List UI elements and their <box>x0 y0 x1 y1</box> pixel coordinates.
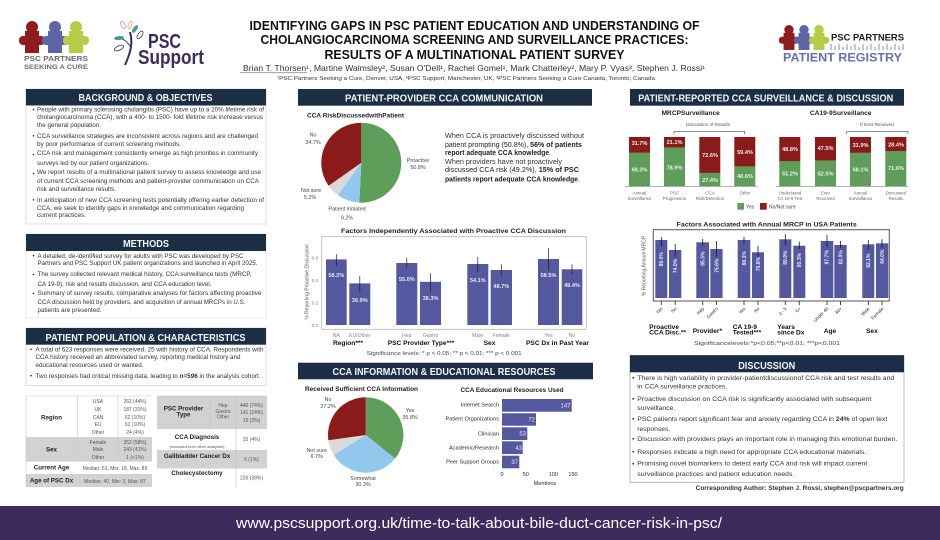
bar chart: factors associated with annual MRCP in USA patients: 88.3% <box>742 251 748 265</box>
bar chart: factors associated with annual MRCP in USA patients: 6+ <box>794 306 802 313</box>
table: demographics: Median: 40, Min: 3, Max: 87 <box>84 479 146 485</box>
pie chart: received sufficient CCA information: Somewhat <box>350 476 376 482</box>
table: demographics: UK <box>95 407 102 413</box>
bar chart: factors associated with proactive CCA discussion: Significance levels: * p < 0.05; ** p < 0.01; *** p < 0.001 <box>367 351 522 357</box>
stacked bars: MRCP surveillance: 40.6% <box>737 174 753 180</box>
stacked bars: CA19-9 surveillance: CA 19-9 Test <box>777 196 803 201</box>
table: clinical characteristics: CCA Diagnosis <box>175 434 220 441</box>
corresponding author: Corresponding Author: Stephen J. Rossi, stephen@pscpartners.org <box>696 485 904 492</box>
table: demographics <box>26 396 152 487</box>
text block: discussion bullets: Discussion with providers plays an important role in managing this emotional burden. <box>637 436 898 443</box>
bar chart: CCA educational resources used: Academic/Research <box>449 446 499 452</box>
text block: methods bullets: Summary of survey results, comparative analyses for factors affecting proactive <box>38 290 262 297</box>
affiliations: ¹PSC Partners Seeking a Cure, Denver, USA, ²PSC Support, Manchester, UK, ³PSC Partners Seeking a Cure Canada, Toronto, Canada <box>277 76 655 82</box>
bar chart: CCA educational resources used: Clinician <box>478 431 499 437</box>
text block: background bullets <box>33 107 264 219</box>
bar chart: factors associated with annual MRCP in USA patients: Yes <box>738 306 747 315</box>
pie chart: received sufficient CCA information: Received Sufficient CCA Information <box>305 386 418 393</box>
table: demographics: 243 (41%) <box>123 447 147 453</box>
table: demographics: 61 (10%) <box>125 422 145 428</box>
text block: discussion bullets: PSC patients report significant fear and anxiety regarding CCA in 24% of open text <box>637 416 888 423</box>
text block: background bullets: In anticipation of new CCA screening tests potentially offering earlier detection of <box>37 197 264 204</box>
logo: PSC Partners Patient Registry <box>779 25 904 64</box>
bar chart: factors associated with annual MRCP in USA patients: Hep <box>696 306 706 316</box>
panel: patient population and characteristics <box>26 328 266 386</box>
heading: methods: METHODS <box>123 238 169 250</box>
bar chart: factors associated with annual MRCP in USA patients: No <box>670 306 678 314</box>
text block: methods bullets: A detailed, de-identified survey for adults with PSC was developed by PSC <box>38 253 244 260</box>
stacked bars: CA19-9 surveillance: Received <box>816 196 835 201</box>
bar chart: factors associated with annual MRCP in USA patients: Tested*** <box>733 330 762 337</box>
bar chart: factors associated with proactive CCA discussion: 58.5% <box>541 273 556 279</box>
bar chart: factors associated with proactive CCA discussion: Sex <box>484 340 496 347</box>
table: clinical characteristics: 15 (2%) <box>243 418 261 424</box>
bar chart: CCA educational resources used: 50 <box>523 472 529 478</box>
title: RESULTS OF A MULTINATIONAL PATIENT SURVEY <box>324 48 625 62</box>
heading: methods <box>26 234 266 251</box>
table: demographics: Female <box>90 440 107 446</box>
bar chart: factors associated with proactive CCA discussion: 36.9% <box>352 298 368 304</box>
pie chart: CCA risk discussed with patient: 50.8% <box>410 165 426 171</box>
table: demographics: USA <box>93 399 104 405</box>
panel heading: patient-reported CCA surveillance and discussion <box>630 89 904 106</box>
bar chart: factors associated with annual MRCP in USA patients: 87.7% <box>825 250 831 264</box>
bar chart: factors associated with proactive CCA discussion: 0.0 <box>312 323 318 328</box>
text block: knowledge callout: patient prompting (50.8%), 56% of patients <box>445 142 582 149</box>
text block: background bullets: current practices. <box>37 212 86 219</box>
stacked bars: CA19-9 surveillance: If Ever Received <box>860 122 894 127</box>
pie chart: received sufficient CCA information: 27.2% <box>320 404 336 410</box>
bar chart: factors associated with annual MRCP in USA patients: Age <box>824 328 836 335</box>
text block: background bullets: CCA surveillance strategies are inconsistent across regions and are challenged <box>37 133 258 140</box>
table: demographics: 187 (31%) <box>123 407 147 413</box>
text block: discussion bullets: Responses indicate a high need for appropriate CCA educational materials. <box>637 449 867 456</box>
text block: methods bullets: CA 19-9), risk and results discussion, and CCA education level. <box>38 281 212 288</box>
pie chart: CCA risk discussed with patient: CCA RiskDiscussedwithPatient <box>307 113 405 120</box>
text block: methods bullets: Partners and PSC Support UK patient organizations and launched in April 2025. <box>38 260 258 267</box>
stacked bars: MRCP surveillance: 78.9% <box>667 166 682 172</box>
bar chart: CCA educational resources used <box>446 387 578 487</box>
text block: knowledge callout: report adequate CCA knowledge. <box>445 150 551 157</box>
text block: knowledge callout: patients report adequate CCA knowledge. <box>445 176 580 184</box>
bar chart: factors associated with annual MRCP in USA patients: CCA Disc.** <box>649 330 686 337</box>
bar chart: factors associated with annual MRCP in USA patients: Significancelevels:*p<0.05;**p<0.01; ***p<0.001 <box>694 341 840 347</box>
title: IDENTIFYING GAPS IN PSC PATIENT EDUCATION AND UNDERSTANDING OF <box>250 19 700 33</box>
table: clinical characteristics: Type <box>177 412 191 418</box>
stacked bars: MRCP surveillance: 68.3% <box>632 168 647 174</box>
table: clinical characteristics: Hep <box>218 403 228 409</box>
text block: background bullets: CCA risk and management consistently emerge as high priorities in community <box>37 150 259 157</box>
table: clinical characteristics: 25 (4%) <box>243 437 261 443</box>
stacked bars: MRCP surveillance: PSC <box>670 190 679 195</box>
table: demographics: Age of PSC Dx <box>30 478 74 484</box>
stacked bars: CA19-9 surveillance: Results <box>889 196 904 201</box>
bar chart: factors associated with annual MRCP in USA patients: Yes <box>655 306 664 315</box>
bar chart: CCA educational resources used: Internet Search <box>461 403 499 409</box>
table: demographics: Other <box>92 430 105 436</box>
panel heading: patient-reported CCA surveillance and discussion: PATIENT-REPORTED CCA SURVEILLANCE & DISCUSSION <box>638 92 893 104</box>
text block: background bullets: by poor performance of current screening methods. <box>37 141 181 148</box>
table: demographics: EU <box>95 422 102 428</box>
pie chart: CCA risk discussed with patient: Patient Initiated <box>328 206 366 212</box>
logo: PSC Partners Seeking a Cure <box>19 21 89 71</box>
table: clinical characteristics: (excluded from other analyses) <box>170 444 225 449</box>
bar chart: CCA educational resources used: 147 <box>560 404 571 410</box>
table: clinical characteristics: Gastro <box>215 409 231 415</box>
bar chart: factors associated with annual MRCP in USA patients: 75.6% <box>714 258 720 273</box>
heading: patient population <box>26 328 266 345</box>
bar chart: factors associated with annual MRCP in USA patients: 84.0% <box>880 249 886 264</box>
bar chart: CCA educational resources used: 150 <box>568 472 578 478</box>
bar chart: CCA educational resources used: 72 <box>528 418 536 424</box>
footer banner with URL <box>0 506 940 540</box>
stacked bars: MRCP surveillance: 27.4% <box>702 178 718 184</box>
heading: background and objectives <box>26 89 266 106</box>
logo: PSC Partners Patient Registry: PATIENT REGISTRY <box>783 50 902 64</box>
stacked bars: CA19-9 surveillance: 28.4% <box>888 142 904 148</box>
logo: PSC Partners Seeking a Cure: SEEKING A CURE <box>24 64 89 71</box>
pie chart: CCA risk discussed with patient: 5.2% <box>304 195 316 201</box>
bar chart: factors associated with annual MRCP in USA patients: 80.3% <box>797 252 803 267</box>
stacked bars: CA19-9 surveillance: Surveillance <box>849 196 873 201</box>
stacked bars: CA19-9 surveillance: Annual <box>854 190 867 195</box>
title <box>250 19 700 62</box>
bar chart: factors associated with proactive CCA discussion: 55.0% <box>399 277 415 283</box>
bar chart: factors associated with annual MRCP in USA patients: Factors Associated with Annual MRCP in USA Patients <box>677 222 857 229</box>
text block: population bullets: A total of 623 responses were received, 25 with history of CCA. Respondents with <box>36 346 264 354</box>
pie chart: CCA risk discussed with patient: 34.7% <box>305 140 321 146</box>
bar chart: CCA educational resources used: Mentions <box>534 481 557 487</box>
bar chart: factors associated with annual MRCP in USA patients: 40+ <box>834 306 843 315</box>
stacked bars: MRCP surveillance: 72.6% <box>702 153 718 159</box>
stacked bars: MRCP surveillance: Other <box>740 190 751 195</box>
title: CHOLANGIOCARCINOMA SCREENING AND SURVEILLANCE PRACTICES: <box>260 33 688 47</box>
table: demographics: 24 (4%) <box>126 430 144 436</box>
bar chart: factors associated with proactive CCA discussion: Male <box>472 333 484 339</box>
bar chart: factors associated with proactive CCA discussion: Female <box>493 333 510 339</box>
bar chart: factors associated with annual MRCP in USA patients: Female <box>870 306 885 321</box>
text block: background bullets: the general population. <box>37 122 101 129</box>
stacked bars: CA19-9 surveillance: 52.5% <box>818 172 833 178</box>
panel: methods <box>26 234 266 318</box>
text block: discussion bullets: surveillance. <box>637 405 676 412</box>
bar chart: factors associated with annual MRCP in USA patients: 82.1% <box>866 253 872 268</box>
logo: PSC Partners Patient Registry: PSC PARTNERS <box>831 32 904 42</box>
panel heading: patient-provider CCA communication: PATIENT-PROVIDER CCA COMMUNICATION <box>345 92 543 104</box>
panel: background and objectives <box>26 89 266 224</box>
text block: population bullets: educational resources used or wanted. <box>36 362 144 369</box>
bar chart: factors associated with annual MRCP in USA patients: since Dx <box>777 330 805 337</box>
bar chart: factors associated with annual MRCP in USA patients <box>642 222 889 347</box>
text block: methods bullets <box>33 253 262 314</box>
text block: background bullets: of current CCA screening methods and patient-provider communication on CCA <box>37 178 260 185</box>
stacked bars: MRCP surveillance <box>625 110 757 201</box>
text block: discussion bullets: in CCA surveillance practices. <box>637 383 728 390</box>
bar chart: factors associated with annual MRCP in USA patients: 82.0% <box>838 250 844 264</box>
panel heading: CCA information and educational resources: CCA INFORMATION & EDUCATIONAL RESOURCES <box>332 366 556 378</box>
bar chart: factors associated with annual MRCP in USA patients: 74.0% <box>673 258 679 273</box>
pie chart: received sufficient CCA information <box>305 386 418 488</box>
text block: discussion bullets: responses. <box>637 426 671 433</box>
bar chart: factors associated with proactive CCA discussion: 38.3% <box>423 296 438 302</box>
text block: population bullets: CCA history received an abbreviated survey, reporting medical history and <box>36 354 241 361</box>
stacked bars: MRCP surveillance: Progression <box>663 196 687 201</box>
bar chart: CCA educational resources used: 100 <box>549 472 558 478</box>
table: clinical characteristics: Gallbladder Cancer Dx <box>164 453 231 460</box>
table: clinical characteristics: PSC Provider <box>164 406 204 412</box>
table: demographics: Current Age <box>34 464 70 472</box>
text block: knowledge callout: When CCA is proactively discussed without <box>445 133 584 140</box>
panel heading: CCA information and educational resources <box>298 363 593 379</box>
bar chart: factors associated with proactive CCA discussion: Gastro <box>423 333 438 339</box>
stacked bars: CA19-9 surveillance: Ever <box>821 190 831 195</box>
stacked bars: CA19-9 surveillance: 68.1% <box>853 168 868 174</box>
bar chart: factors associated with proactive CCA discussion: NA <box>333 333 340 339</box>
stacked bars: CA19-9 surveillance: 47.5% <box>818 146 833 152</box>
bar chart: CCA educational resources used: 53 <box>519 432 527 438</box>
text block: knowledge callout: When providers have not proactively <box>445 159 563 166</box>
bar chart: factors associated with proactive CCA discussion: 58.2% <box>328 273 344 279</box>
text block: discussion bullets: Promising novel biomarkers to detect early CCA and risk will impact current <box>637 461 868 468</box>
panel: discussion <box>630 355 904 482</box>
text block: knowledge callout: discussed CCA risk (49.2%), 15% of PSC <box>445 167 579 174</box>
stacked bars: MRCP surveillance: Discussion of Results <box>686 122 731 127</box>
table: demographics: 62 (10%) <box>125 415 145 421</box>
bar chart: factors associated with proactive CCA discussion: PSC Provider Type*** <box>388 340 455 347</box>
stacked bars: CA19-9 surveillance: 71.6% <box>888 166 904 172</box>
bar chart: factors associated with annual MRCP in USA patients: Male <box>860 306 871 317</box>
bar chart: factors associated with annual MRCP in USA patients: Sex <box>866 328 878 335</box>
heading: background and objectives: BACKGROUND & OBJECTIVES <box>78 92 212 104</box>
bar chart: factors associated with proactive CCA discussion: Factors Independently Associated with Proactive CCA Discussion <box>341 228 566 235</box>
heading: patient population: PATIENT POPULATION & CHARACTERISTICS <box>46 332 246 344</box>
bar chart: CCA educational resources used: 0 <box>500 472 504 478</box>
text block: discussion bullets: surveillance practices and patient education needs. <box>637 471 795 478</box>
stacked bars: MRCP surveillance: CCA <box>705 190 715 195</box>
table: demographics: Median: 51, Min: 18, Max: 89 <box>83 466 147 472</box>
pie chart: CCA risk discussed with patient: 9.2% <box>341 216 353 222</box>
panel heading: patient-provider CCA communication <box>298 89 592 106</box>
pie chart: received sufficient CCA information: Yes <box>406 408 415 414</box>
text block: population bullets <box>30 346 264 380</box>
logo: PSC Support: Support <box>138 47 204 69</box>
bar chart: CCA educational resources used: CCA Educational Resources Used <box>460 387 564 394</box>
logo: PSC Support: PSC <box>148 31 181 53</box>
bar chart: factors associated with annual MRCP in USA patients: Provider* <box>693 328 722 335</box>
table: demographics: Other <box>92 455 105 461</box>
logo: PSC Partners Seeking a Cure: PSC PARTNERS <box>24 54 88 63</box>
bar chart: factors associated with annual MRCP in USA patients: 70.8% <box>756 256 762 271</box>
table: demographics: CAN <box>93 415 104 421</box>
stacked bars: CA19-9 surveillance: 48.8% <box>782 147 798 153</box>
text block: background bullets: cholangiocarcinoma (CCA), with a 400- to 1500- fold lifetime risk increase versus <box>37 114 263 121</box>
bar chart: factors associated with annual MRCP in USA patients: Gastro <box>706 306 719 319</box>
stacked bars: CA19-9 surveillance: Understand <box>779 190 802 195</box>
text block: background bullets: surveys led by our patient organizations. <box>37 160 149 167</box>
footer banner with URL: www.pscsupport.org.uk/time-to-talk-about-bile-duct-cancer-risk-in-psc/ <box>235 516 723 532</box>
bar chart: factors associated with proactive CCA discussion: 48.7% <box>493 284 509 290</box>
stacked bars: MRCP surveillance: MRCPSurveillance <box>662 110 720 117</box>
bar chart: CCA educational resources used: Peer Support Groups <box>446 460 499 466</box>
text block: knowledge callout <box>445 133 584 184</box>
text block: population bullets: Two responses had critical missing data, leading to n=596 in the analysis cohort. <box>36 373 261 380</box>
bar chart: factors associated with annual MRCP in USA patients: Under 40 <box>813 306 830 323</box>
stacked bars: MRCP surveillance: Risk/Detection <box>696 196 725 201</box>
table: clinical characteristics: 141 (24%) <box>240 410 263 416</box>
bar chart: factors associated with proactive CCA discussion: 0.4 <box>312 278 318 283</box>
stacked bars: CA19-9 surveillance: CA19-9Surveillance <box>810 110 872 117</box>
table: clinical characteristics: Cholecystectomy <box>171 470 223 477</box>
heading: discussion <box>630 355 904 372</box>
bar chart: factors associated with proactive CCA discussion: % Reporting Proactive Discussion <box>304 244 310 320</box>
bar chart: factors associated with annual MRCP in USA patients: % Reporting Annual MRCP <box>642 235 648 296</box>
text block: background bullets: We report results of a multinational patient survey to assess knowledge and use <box>37 169 261 176</box>
text block: background bullets: People with primary sclerosing cholangitis (PSC) have up to a 20% lifetime risk of <box>37 107 264 114</box>
legend: yes and no or not sure <box>737 203 796 210</box>
text block: methods bullets: CCA discussion held by providers, and acquisition of annual MRCPs in U.S. <box>38 299 246 306</box>
pie chart: CCA risk discussed with patient: No <box>310 132 316 138</box>
authors: Brian T. Thorsen¹, Martine Walmsley², Susan O'Dell¹, Rachel Gomel¹, Mark Chatterley², Mary P. Vyas³, Stephen J. Rossi¹ <box>243 63 705 73</box>
stacked bars: MRCP surveillance: 59.4% <box>737 150 753 156</box>
bar chart: factors associated with proactive CCA discussion: 54.1% <box>470 278 486 284</box>
pie chart: received sufficient CCA information: 30.3% <box>355 482 371 488</box>
table: clinical characteristics <box>157 396 267 488</box>
stacked bars: MRCP surveillance: Surveillance <box>628 196 652 201</box>
table: clinical characteristics: 6 (1%) <box>244 457 259 463</box>
table: clinical characteristics: 440 (74%) <box>240 403 263 409</box>
pie chart: CCA risk discussed with patient: Proactive <box>407 158 429 164</box>
bar chart: CCA educational resources used: 43 <box>515 446 523 452</box>
text block: discussion bullets <box>632 375 898 478</box>
bar chart: factors associated with proactive CCA discussion: EU/Other <box>349 333 371 339</box>
stacked bars: MRCP surveillance: 21.1% <box>667 140 682 146</box>
bar chart: factors associated with proactive CCA discussion: Region*** <box>333 340 363 347</box>
table: clinical characteristics: 226 (38%) <box>240 476 263 482</box>
bar chart: factors associated with annual MRCP in USA patients: 85.3% <box>700 251 706 266</box>
bar chart: CCA educational resources used: 37 <box>511 460 519 466</box>
stacked bars: CA19-9 surveillance: 31.9% <box>853 143 868 149</box>
bar chart: factors associated with proactive CCA discussion <box>304 228 589 357</box>
text block: methods bullets: The survey collected relevant medical history, CCA surveillance tests (MRCP, <box>38 271 252 278</box>
pie chart: received sufficient CCA information: 6.7% <box>311 454 323 460</box>
bar chart: factors associated with proactive CCA discussion: PSC Dx in Past Year <box>526 340 589 347</box>
pie chart: CCA risk discussed with patient <box>301 113 429 222</box>
table: demographics: 1 (<1%) <box>126 455 144 461</box>
bar chart: factors associated with proactive CCA discussion: 49.4% <box>564 283 580 289</box>
bar chart: factors associated with annual MRCP in USA patients: Years <box>777 324 795 331</box>
table: clinical characteristics: Other <box>217 414 230 420</box>
bar chart: factors associated with annual MRCP in USA patients: 88.0% <box>659 252 665 266</box>
text block: background bullets: CCA, we seek to identify gaps in knowledge and communication regarding <box>37 205 244 212</box>
bar chart: factors associated with annual MRCP in USA patients: No <box>753 306 761 314</box>
pie chart: received sufficient CCA information: Not sure <box>307 448 327 454</box>
bar chart: factors associated with proactive CCA discussion: No <box>569 333 575 339</box>
text block: methods bullets: patients are presented. <box>38 307 102 314</box>
pie chart: CCA risk discussed with patient: Not sure <box>301 188 321 194</box>
stacked bars: CA19-9 surveillance: 51.2% <box>782 172 798 178</box>
stacked bars: MRCP surveillance: Annual <box>633 190 646 195</box>
table: demographics: Male <box>93 447 104 453</box>
bar chart: factors associated with proactive CCA discussion: 0.2 <box>312 300 318 305</box>
bar chart: factors associated with annual MRCP in USA patients: Proactive <box>649 324 679 331</box>
bar chart: factors associated with proactive CCA discussion: Yes <box>544 333 553 339</box>
text block: discussion bullets: Proactive discussion on CCA risk is significantly associated with subsequent <box>637 396 872 403</box>
logo: PSC Support <box>114 21 204 69</box>
table: demographics: 352 (58%) <box>123 440 147 446</box>
heading: discussion: DISCUSSION <box>738 360 795 372</box>
bar chart: factors associated with proactive CCA discussion: Hep <box>402 333 412 339</box>
stacked bars: CA19-9 surveillance <box>776 110 908 201</box>
bar chart: factors associated with proactive CCA discussion: 0.6 <box>312 255 318 260</box>
legend: yes and no or not sure: No/Not sure <box>769 204 796 210</box>
table: demographics: Sex <box>46 446 58 454</box>
bar chart: factors associated with annual MRCP in USA patients: CA 19-9 <box>733 324 757 331</box>
bar chart: factors associated with annual MRCP in USA patients: 2 - 5 <box>778 306 788 316</box>
bar chart: factors associated with annual MRCP in USA patients: 89.9% <box>783 250 789 265</box>
text block: background bullets: risk and surveillance results. <box>37 186 116 193</box>
text block: discussion bullets: There is high variability in provider-patientdiscussionof CCA risk and test results and <box>637 375 895 382</box>
table: demographics: Region <box>41 414 62 422</box>
legend: yes and no or not sure: Yes <box>746 204 755 210</box>
pie chart: received sufficient CCA information: No <box>325 397 331 403</box>
stacked bars: CA19-9 surveillance: Discussed <box>886 190 907 195</box>
table: demographics: 262 (44%) <box>123 399 147 405</box>
bar chart: CCA educational resources used: Patient Organizations <box>446 417 499 423</box>
stacked bars: MRCP surveillance: 31.7% <box>632 141 647 147</box>
pie chart: received sufficient CCA information: 35.8% <box>402 415 418 421</box>
